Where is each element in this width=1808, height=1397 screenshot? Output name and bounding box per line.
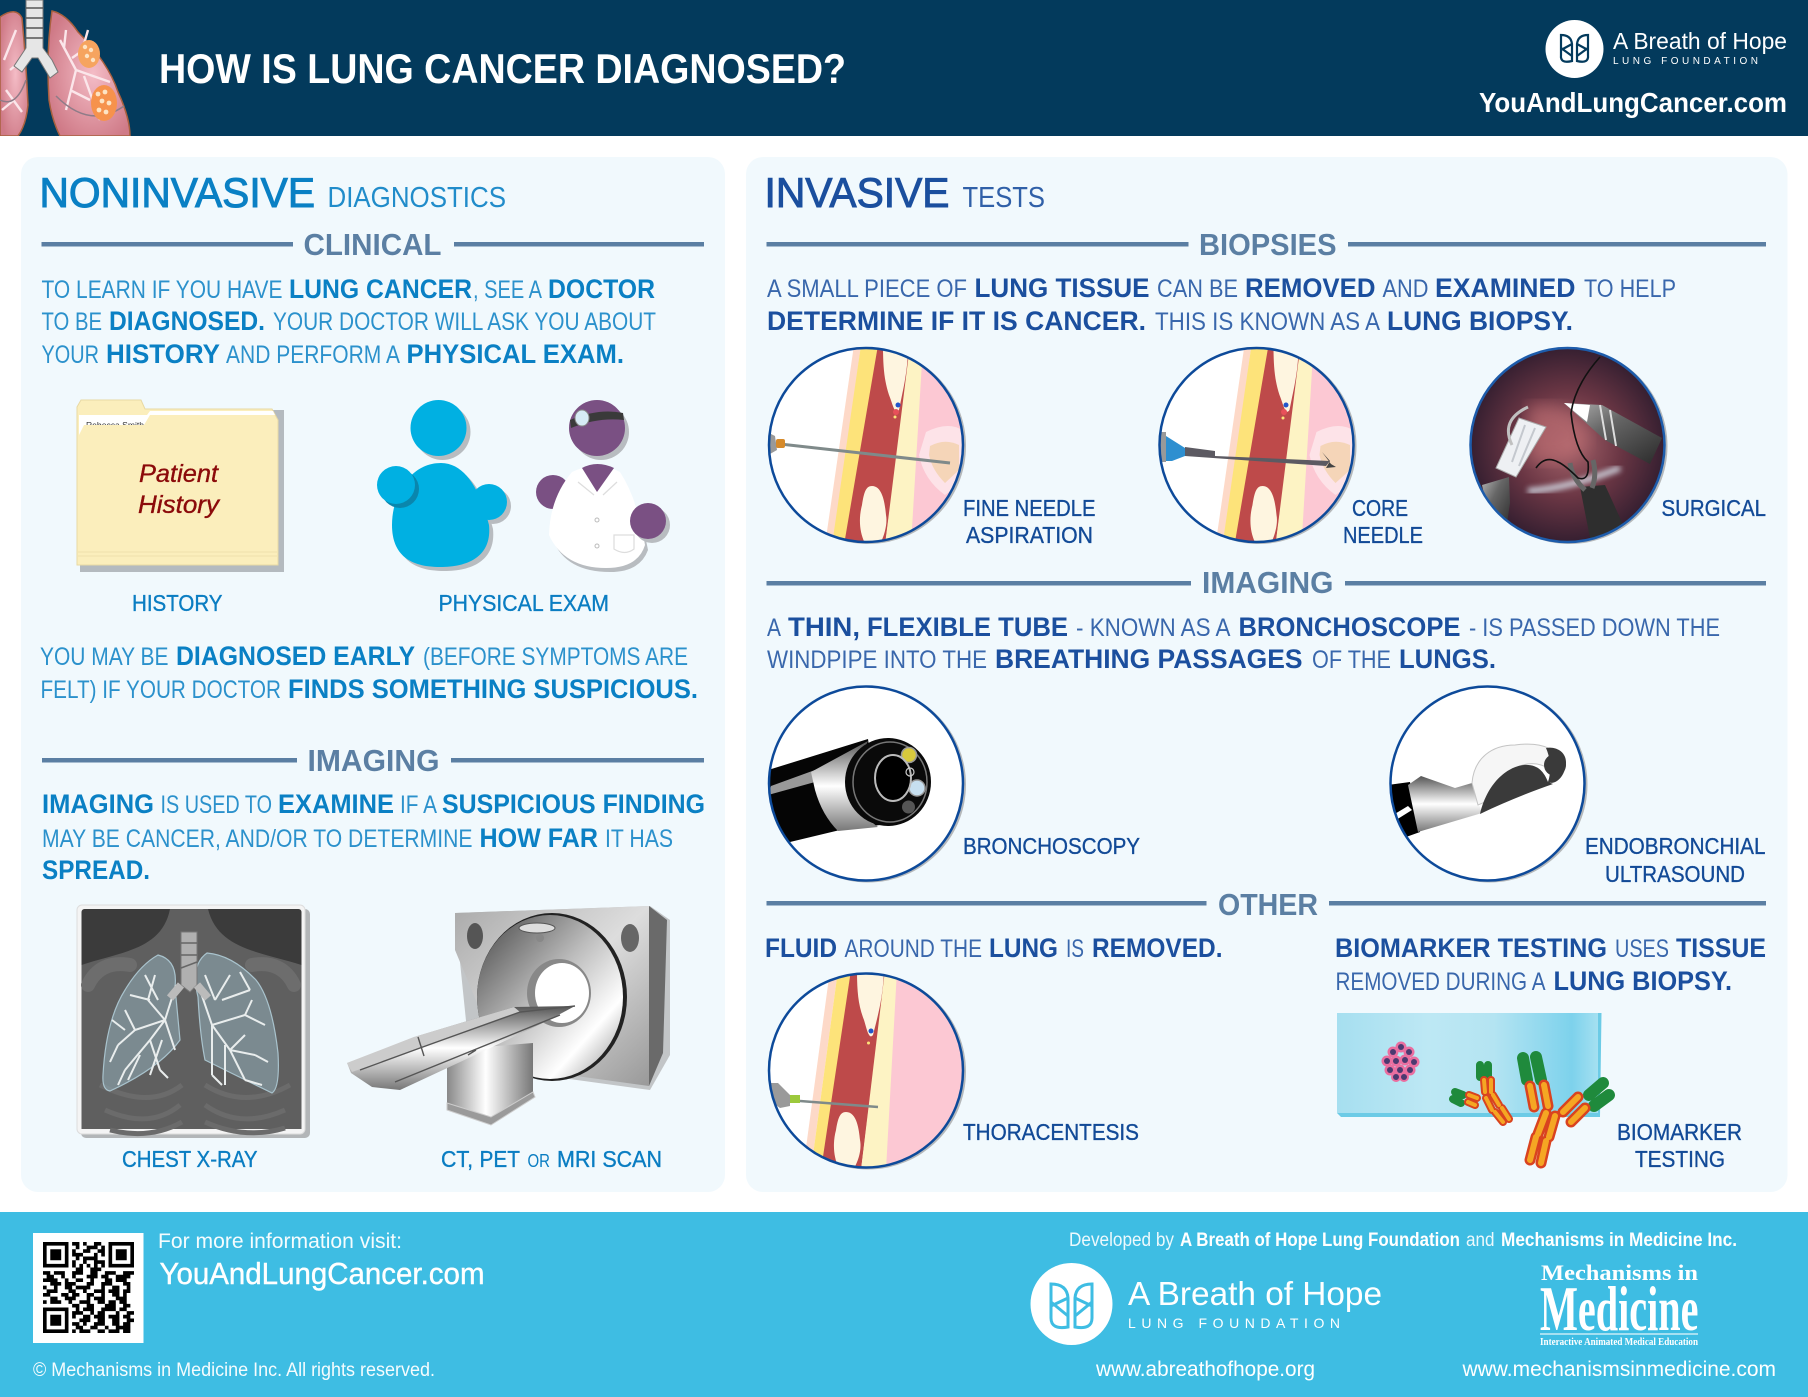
biomarker text: BIOMARKER TESTING: [1335, 933, 1607, 963]
header banner: [0, 0, 1808, 136]
biopsies text: DETERMINE IF IT IS CANCER.: [767, 306, 1146, 336]
QR code: [33, 1233, 144, 1343]
fluid text: AROUND THE: [844, 935, 982, 963]
icon: patient history folder: [77, 400, 284, 572]
website: mechanismsinmedicine: www.mechanismsinmedicine.com: [1462, 1358, 1776, 1381]
icon: bronchoscope: [765, 686, 966, 882]
icon: lungs with tumors: [0, 0, 130, 136]
logo: Mechanisms in Medicine: Mechanisms in: [1541, 1260, 1698, 1285]
antibody: small: [1453, 1065, 1509, 1122]
icon: endobronchial ultrasound: [1388, 686, 1588, 882]
biomarker text: [1335, 933, 1766, 996]
icon: biomarker slide with antibodies: [1337, 1013, 1609, 1163]
label: core needle: NEEDLE: [1343, 522, 1423, 548]
logo: A Breath of Hope (footer): LUNG FOUNDATION: [1128, 1315, 1340, 1331]
early diagnosis text: YOU MAY BE: [40, 643, 168, 671]
biomarker text: REMOVED DURING A: [1336, 968, 1546, 996]
section heading: clinical: CLINICAL: [304, 227, 442, 262]
biopsies text: A SMALL PIECE OF: [767, 275, 967, 303]
bronchoscope text: A: [767, 614, 781, 642]
tumor cells: [1382, 1042, 1420, 1082]
panel heading: INVASIVE: [764, 169, 950, 216]
clinical text: TO LEARN IF YOU HAVE: [42, 276, 282, 304]
biopsies text: AND: [1382, 275, 1428, 303]
label: history: HISTORY: [132, 590, 222, 616]
folder label: [138, 460, 221, 519]
label: fine needle aspiration: ASPIRATION: [966, 522, 1093, 548]
label: thoracentesis: THORACENTESIS: [963, 1119, 1139, 1145]
label: CT, PET or MRI scan: OR: [528, 1151, 550, 1171]
bronchoscope text: FLEXIBLE TUBE: [867, 612, 1068, 642]
biopsies text: [767, 273, 1676, 336]
clinical text: DOCTOR: [548, 274, 655, 304]
developed by credit: A Breath of Hope Lung Foundation: [1180, 1230, 1460, 1251]
early diagnosis text: [40, 641, 698, 704]
folder label: Patient: [139, 460, 219, 488]
logo: A Breath of Hope (footer): A Breath of Hope: [1128, 1275, 1382, 1312]
bronchoscope text: - IS PASSED DOWN THE: [1469, 614, 1720, 642]
biomarker text: LUNG BIOPSY.: [1554, 966, 1732, 996]
panel: invasive tests: [746, 157, 1788, 1192]
imaging text: IS USED TO: [160, 791, 272, 819]
label: biomarker testing: BIOMARKER: [1617, 1119, 1742, 1145]
footer: [0, 1212, 1808, 1397]
early diagnosis text: (BEFORE SYMPTOMS ARE: [423, 643, 688, 671]
imaging text: IT HAS: [605, 825, 673, 853]
label: CT, PET or MRI scan: [441, 1146, 662, 1172]
fluid text: REMOVED.: [1092, 933, 1222, 963]
icon: chest x-ray: [77, 905, 310, 1138]
section heading: imaging: [766, 565, 1766, 600]
clinical text: [42, 274, 656, 369]
bronchoscope text: BREATHING PASSAGES: [995, 644, 1302, 674]
antibody: large: [1523, 1057, 1609, 1163]
more info text: [158, 1230, 484, 1291]
logo: A Breath of Hope (header): LUNG FOUNDATION: [1613, 56, 1758, 67]
clinical text: HISTORY: [106, 339, 220, 369]
fluid text: LUNG: [989, 933, 1058, 963]
website: abreathofhope: www.abreathofhope.org: [1095, 1358, 1315, 1381]
imaging text: EXAMINE: [278, 789, 394, 819]
developed by credit: Developed by: [1069, 1230, 1174, 1251]
label: endobronchial ultrasound: ENDOBRONCHIAL: [1585, 833, 1766, 859]
label: core needle: CORE: [1352, 495, 1408, 521]
more info text: YouAndLungCancer.com: [160, 1256, 484, 1291]
label: bronchoscopy: BRONCHOSCOPY: [963, 833, 1140, 859]
section heading: imaging: [42, 743, 704, 778]
logo: A Breath of Hope (header): A Breath of Hope: [1613, 28, 1787, 54]
label: surgical: SURGICAL: [1662, 495, 1766, 521]
clinical text: PHYSICAL EXAM.: [406, 339, 624, 369]
logo: A Breath of Hope (footer): [1030, 1263, 1382, 1345]
label: biomarker testing: [1617, 1119, 1742, 1172]
label: endobronchial ultrasound: ULTRASOUND: [1605, 861, 1745, 887]
bronchoscope text: LUNGS.: [1399, 644, 1496, 674]
icon: patient figure: [377, 400, 511, 571]
logo: Mechanisms in Medicine: [1540, 1260, 1698, 1348]
section heading: biopsies: BIOPSIES: [1199, 227, 1336, 262]
bronchoscope text: WINDPIPE INTO THE: [767, 646, 987, 674]
label: endobronchial ultrasound: [1585, 833, 1766, 887]
imaging text: HOW FAR: [480, 823, 598, 853]
imaging text: IMAGING: [42, 789, 154, 819]
label: biomarker testing: TESTING: [1635, 1146, 1725, 1172]
panel heading: [764, 169, 1045, 216]
label: fine needle aspiration: [963, 495, 1096, 548]
bronchoscope text: BRONCHOSCOPE: [1238, 612, 1460, 642]
icon: surgical biopsy: [1470, 348, 1668, 548]
biomarker text: USES: [1615, 935, 1669, 963]
more info text: For more information visit:: [158, 1230, 402, 1253]
icon: CT scanner: [347, 906, 670, 1125]
label: CT, PET or MRI scan: MRI SCAN: [557, 1146, 662, 1172]
biomarker text: TISSUE: [1676, 933, 1766, 963]
label: CT, PET or MRI scan: PET: [480, 1146, 520, 1172]
biopsies text: EXAMINED: [1435, 273, 1576, 303]
section heading: imaging: IMAGING: [308, 743, 440, 778]
clinical text: AND PERFORM A: [226, 341, 400, 369]
developed by credit: Mechanisms in Medicine Inc.: [1501, 1230, 1737, 1251]
biopsies text: LUNG BIOPSY.: [1387, 306, 1573, 336]
developed by credit: and: [1466, 1230, 1494, 1251]
clinical text: LUNG CANCER: [289, 274, 472, 304]
bronchoscope text: [767, 612, 1720, 674]
panel heading: TESTS: [962, 182, 1045, 214]
fluid text: [765, 933, 1222, 963]
panel heading: [40, 169, 506, 216]
fluid text: FLUID: [765, 933, 837, 963]
logo: Mechanisms in Medicine: Medicine: [1540, 1274, 1698, 1344]
folder label: History: [138, 491, 221, 519]
fluid text: IS: [1066, 935, 1084, 963]
biopsies text: REMOVED: [1245, 273, 1376, 303]
panel: noninvasive diagnostics: [21, 157, 725, 1192]
label: fine needle aspiration: FINE NEEDLE: [963, 495, 1096, 521]
developed by credit: [1069, 1230, 1737, 1251]
early diagnosis text: FELT) IF YOUR DOCTOR: [40, 676, 281, 704]
panel heading: NONINVASIVE: [40, 169, 315, 216]
section heading: imaging: IMAGING: [1202, 565, 1334, 600]
website link: YouAndLungCancer.com: [1479, 87, 1787, 118]
biopsies text: THIS IS KNOWN AS A: [1155, 308, 1380, 336]
icon: core needle: [1159, 345, 1360, 545]
label: physical exam: PHYSICAL EXAM: [438, 590, 609, 616]
clinical text: , SEE A: [473, 276, 542, 304]
section heading: other: OTHER: [1218, 887, 1318, 922]
early diagnosis text: FINDS SOMETHING SUSPICIOUS.: [288, 674, 698, 704]
bronchoscope text: THIN,: [788, 612, 860, 642]
icon: doctor figure: [536, 400, 670, 572]
label: CT, PET or MRI scan: CT,: [441, 1146, 473, 1172]
copyright: © Mechanisms in Medicine Inc. All rights reserved.: [33, 1360, 435, 1381]
clinical text: YOUR DOCTOR WILL ASK YOU ABOUT: [273, 308, 656, 336]
icon: thoracentesis: [769, 970, 970, 1170]
clinical text: TO BE: [42, 308, 102, 336]
imaging text: [42, 789, 705, 885]
label: chest x-ray: CHEST X-RAY: [122, 1146, 258, 1172]
biopsies text: LUNG TISSUE: [974, 273, 1150, 303]
icon: patient history folder: Rebecca Smith: [86, 421, 144, 430]
title: HOW IS LUNG CANCER DIAGNOSED?: [159, 45, 846, 92]
clinical text: YOUR: [42, 341, 99, 369]
imaging text: IF A: [400, 791, 437, 819]
early diagnosis text: DIAGNOSED EARLY: [176, 641, 415, 671]
bronchoscope text: - KNOWN AS A: [1076, 614, 1231, 642]
section heading: clinical: [42, 227, 704, 262]
section heading: biopsies: [766, 227, 1766, 262]
logo: Mechanisms in Medicine: Interactive Animated Medical Education: [1540, 1337, 1698, 1348]
clinical text: DIAGNOSED.: [109, 306, 265, 336]
imaging text: SPREAD.: [42, 855, 150, 885]
biopsies text: TO HELP: [1584, 275, 1676, 303]
imaging text: SUSPICIOUS FINDING: [442, 789, 705, 819]
imaging text: MAY BE CANCER, AND/OR TO DETERMINE: [42, 825, 472, 853]
icon: fine needle aspiration: [767, 345, 970, 545]
biopsies text: CAN BE: [1157, 275, 1238, 303]
logo: A Breath of Hope (header): [1546, 20, 1787, 78]
label: core needle: [1343, 495, 1423, 548]
section heading: other: [766, 887, 1766, 922]
bronchoscope text: OF THE: [1312, 646, 1391, 674]
panel heading: DIAGNOSTICS: [328, 182, 506, 214]
